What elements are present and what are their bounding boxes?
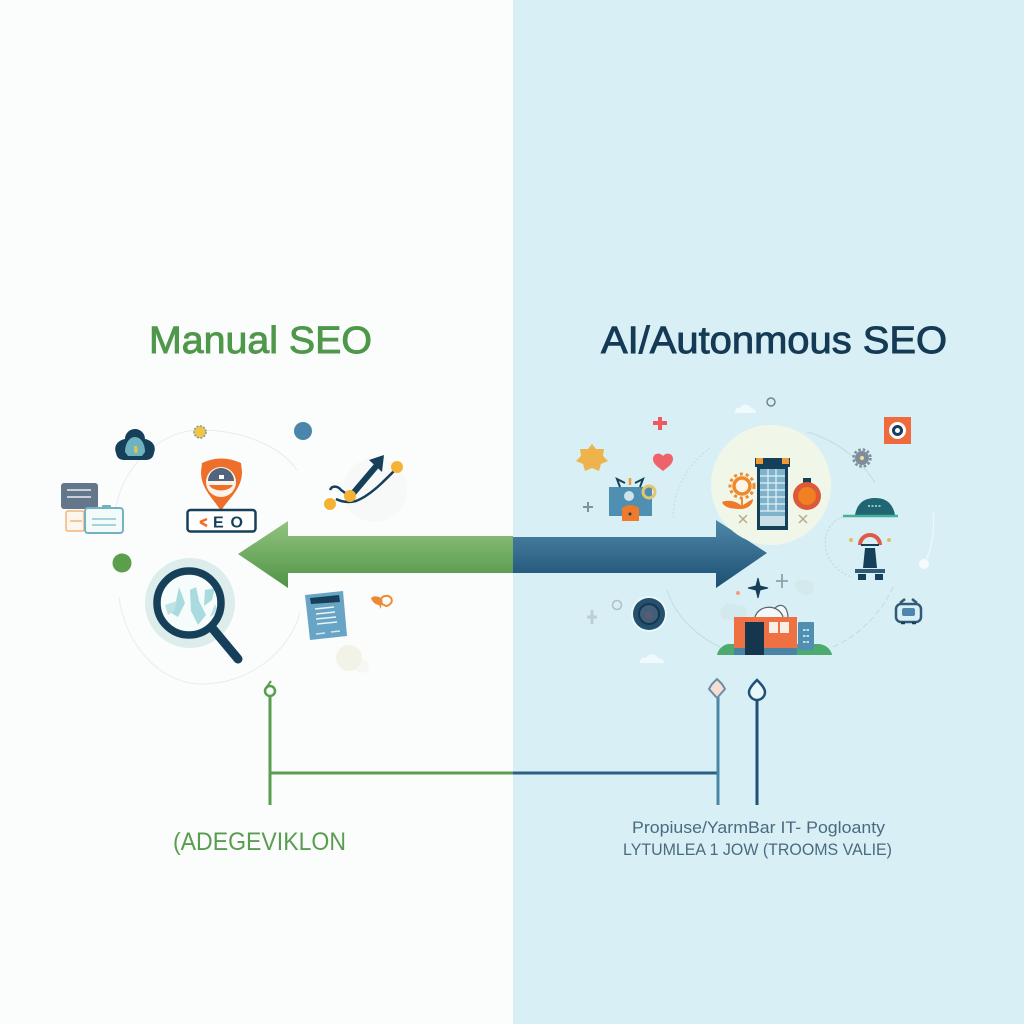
text: autonomous caption: LYTUMLEA 1 JOW (TROOMS VALIE) bbox=[623, 840, 892, 859]
icon: server tower bbox=[755, 458, 790, 530]
arrow: manual pointing left bbox=[238, 521, 513, 588]
icon: flower and hands bbox=[722, 474, 754, 509]
highlight circle bbox=[711, 425, 831, 545]
icon: SEO label box bbox=[188, 510, 256, 532]
connector: blue horizontal bbox=[513, 772, 718, 774]
orbit ring: autonomous bbox=[667, 432, 893, 647]
text: manual caption: (ADEGEVIKLON bbox=[173, 828, 346, 856]
icon: red plus bbox=[653, 417, 667, 430]
panel: manual SEO icon cluster bbox=[61, 422, 407, 684]
icon: small robot frame bbox=[896, 599, 921, 623]
icon: SEO label box: EO bbox=[213, 514, 243, 532]
icon: yellow star bbox=[576, 444, 608, 471]
text: autonomous caption: Propiuse/YarmBar IT- Pogloanty bbox=[632, 818, 886, 837]
icon: navy star bbox=[748, 578, 768, 598]
panel: autonomous SEO icon cluster bbox=[576, 398, 934, 663]
icon: small yellow gear bbox=[194, 426, 206, 438]
sparkle marks bbox=[739, 515, 807, 523]
connector: navy stem bbox=[756, 700, 758, 805]
icon: grey gear bbox=[854, 450, 870, 466]
connector: blue stem bbox=[716, 697, 720, 805]
icon: navy drop marker bbox=[749, 680, 765, 700]
icon: grey star bbox=[776, 574, 788, 588]
icon: beacon tower bbox=[849, 535, 891, 580]
icon: heart bbox=[653, 454, 673, 471]
icon: chat cards bbox=[61, 483, 123, 533]
connector: green stem bbox=[268, 696, 272, 805]
icon: camera lens bbox=[631, 596, 667, 632]
icon: magnifying glass bbox=[145, 558, 238, 659]
icon: blue box with lock bbox=[609, 478, 655, 521]
icon: report document bbox=[305, 591, 347, 640]
icon: blue stem marker bbox=[709, 679, 725, 698]
orbit ring: manual bbox=[116, 430, 300, 684]
icon: small grey plus bbox=[583, 502, 593, 512]
white dot bbox=[919, 559, 929, 569]
icon: shop building bbox=[717, 605, 832, 655]
icon: orange square gear bbox=[884, 417, 911, 444]
icon: cloud badge bbox=[115, 429, 155, 460]
beige dot bbox=[336, 645, 369, 673]
side orbit arc bbox=[825, 517, 852, 577]
connector: green horizontal bbox=[270, 772, 513, 774]
panel: autonomous background bbox=[513, 0, 1024, 1024]
text: autonomous caption bbox=[623, 818, 892, 859]
icon: green stem marker bbox=[265, 681, 275, 696]
icon: small orange glyph bbox=[371, 596, 392, 609]
faint clouds bbox=[720, 580, 814, 620]
heading: AI/Autonomous SEO: AI/Autonmous SEO bbox=[601, 320, 947, 362]
panel: manual background bbox=[0, 0, 513, 1024]
small ring bbox=[767, 398, 775, 406]
green dot bbox=[112, 554, 132, 572]
icon: lower cloud bbox=[640, 654, 664, 663]
heading: Manual SEO: Manual SEO bbox=[149, 320, 372, 362]
icon: dome base bbox=[843, 498, 898, 516]
icon: location pin bbox=[201, 458, 242, 511]
icon: faint plus bbox=[587, 610, 597, 624]
icon: red ornament bbox=[793, 478, 821, 510]
white trail arc bbox=[924, 512, 934, 564]
icon: top cloud bbox=[735, 405, 756, 413]
blue dot bbox=[294, 422, 312, 440]
panel: connector diagram bbox=[265, 679, 765, 805]
icon: growth chart arrow bbox=[324, 455, 407, 522]
small ring left bbox=[612, 600, 622, 610]
arrow: autonomous pointing right bbox=[513, 520, 767, 588]
